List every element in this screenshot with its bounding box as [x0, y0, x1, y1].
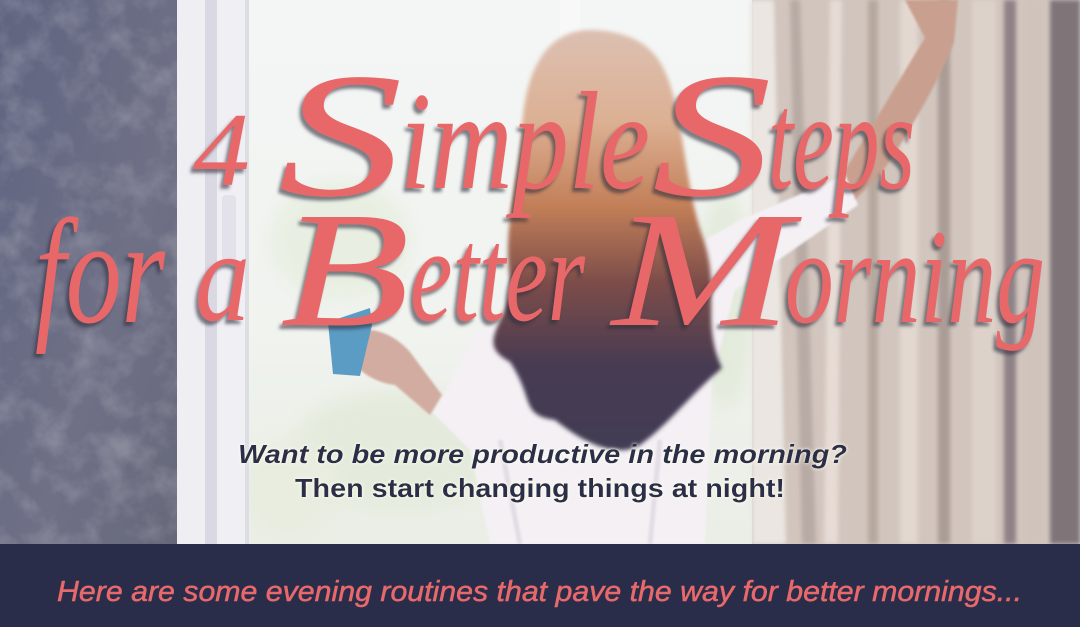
title line 2: a	[195, 205, 250, 349]
title line 1: teps	[768, 64, 915, 219]
white shirt	[432, 175, 858, 544]
blue mug	[328, 308, 372, 376]
forearm holding mug	[345, 330, 442, 415]
foliage outside the window	[240, 180, 755, 540]
title	[35, 36, 1045, 361]
raised arm and hand	[845, 0, 958, 205]
title line 2: etter	[410, 201, 585, 350]
wall left	[0, 0, 177, 544]
window glow	[175, 0, 765, 544]
title line 2: for	[35, 189, 165, 355]
subheading question: Want to be more productive in the morning?	[238, 439, 847, 469]
subheading	[238, 439, 847, 503]
curtain	[750, 0, 1080, 544]
title line 2	[35, 178, 1045, 361]
window frame	[177, 0, 580, 544]
title line 1: imple	[400, 64, 650, 219]
band text: Here are some evening routines that pave the way for better mornings...	[57, 576, 1022, 608]
subheading statement: Then start changing things at night!	[295, 473, 785, 503]
title line 2: M	[609, 178, 803, 361]
title line 1	[193, 36, 915, 234]
long hair	[493, 30, 722, 450]
title line 1: 4	[193, 91, 250, 208]
title line 1: S	[278, 36, 403, 234]
bottom band	[0, 544, 1080, 627]
title line 1: S	[652, 36, 772, 234]
title line 2: B	[280, 178, 410, 361]
